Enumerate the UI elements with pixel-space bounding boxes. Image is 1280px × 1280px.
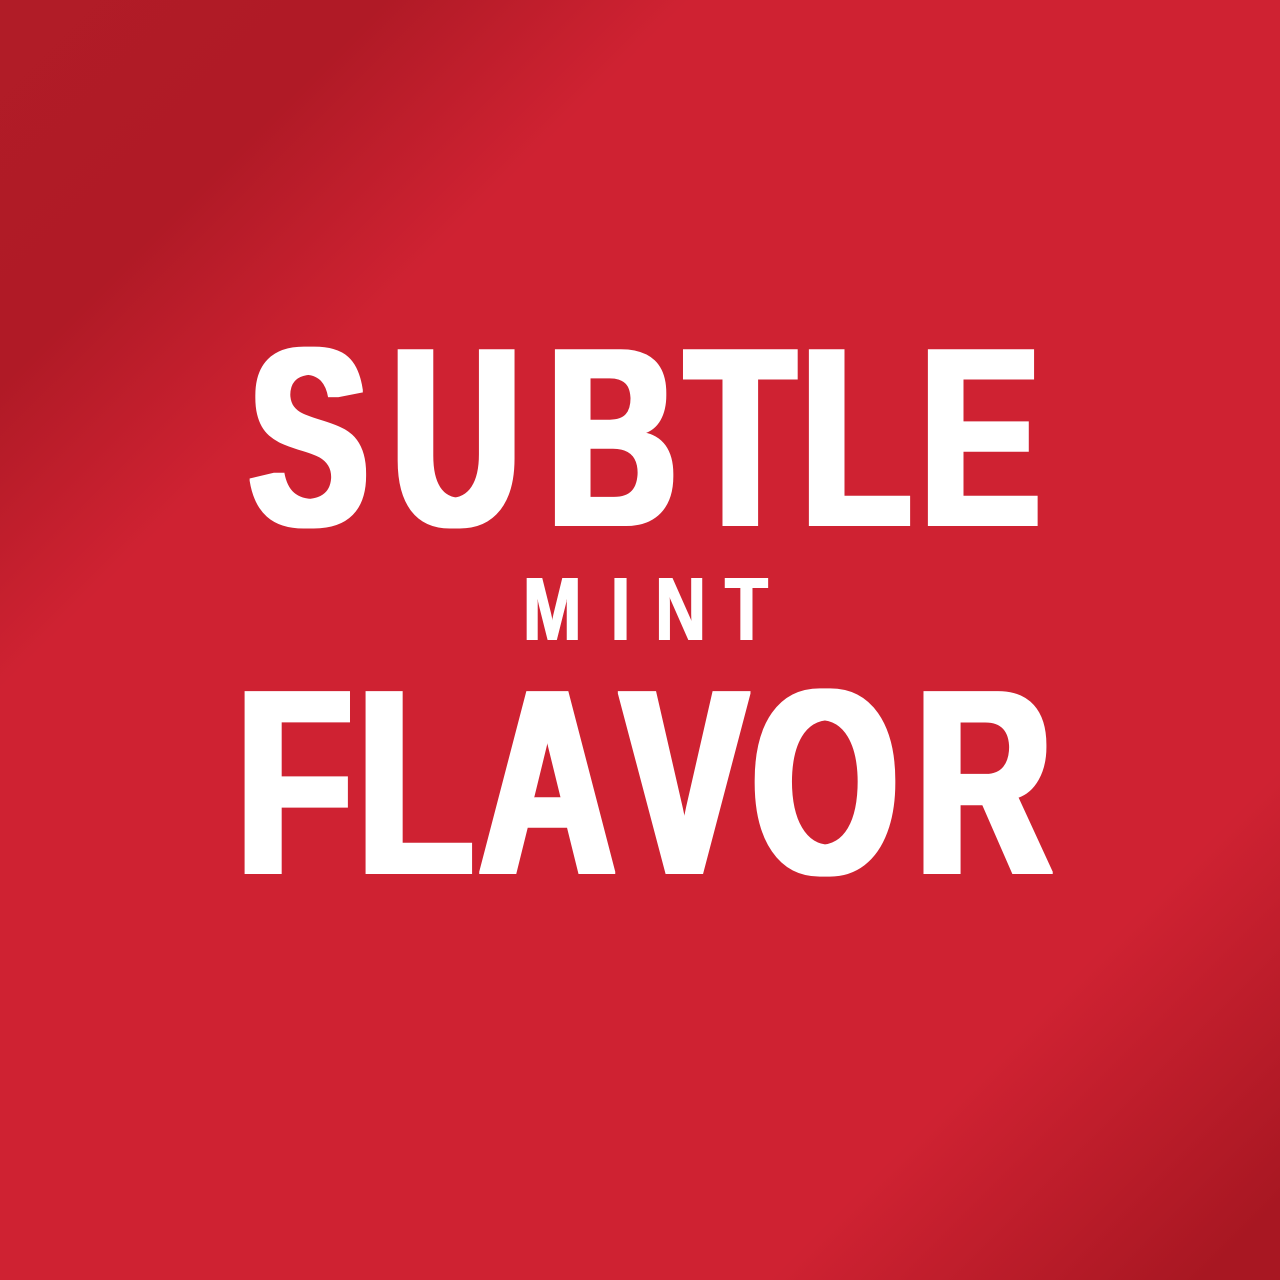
heading: FLAVOR: FLAVOR bbox=[237, 636, 1052, 929]
heading: SUBTLE: SUBTLE bbox=[249, 297, 1040, 579]
subheading: MINT: MINT bbox=[523, 560, 768, 660]
